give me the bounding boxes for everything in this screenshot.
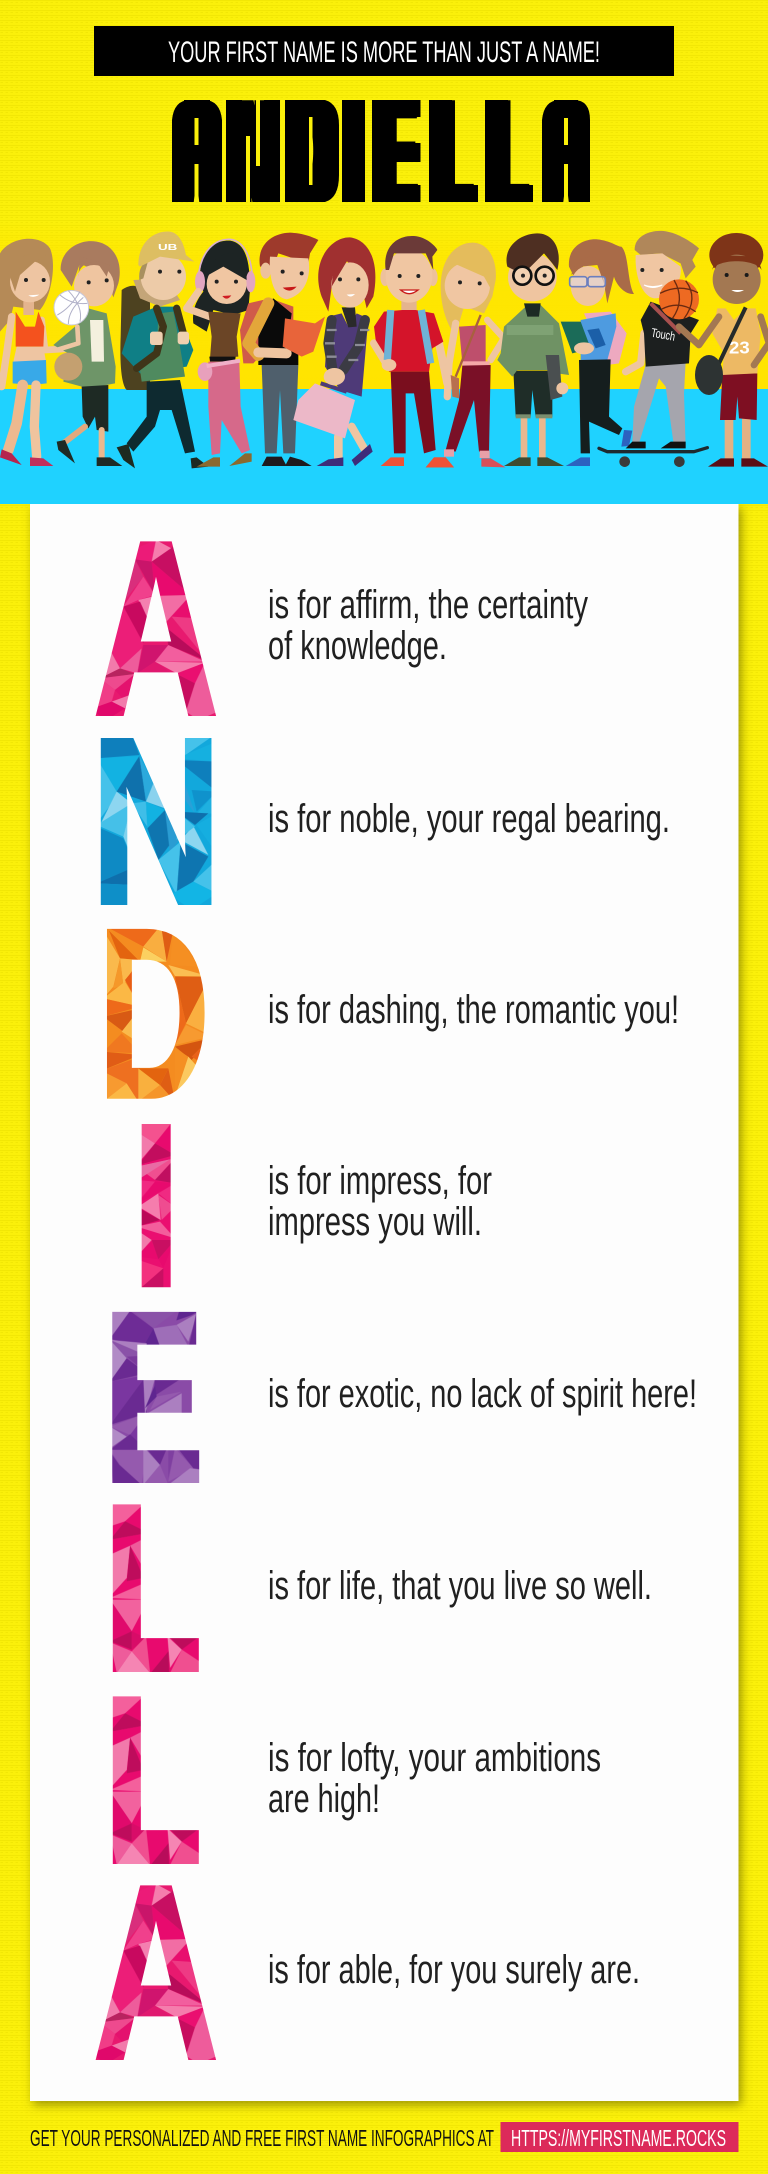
person: skateboarder with basketball: Touch — [650, 326, 676, 344]
person: blonde girl — [426, 243, 506, 467]
text: A line — [268, 583, 588, 668]
letter I: I — [128, 1073, 184, 1338]
letter N: N — [90, 688, 222, 953]
text: second L line: are high! — [268, 1777, 380, 1821]
person: ponytail girl with tablet — [561, 239, 634, 466]
person: curly haired boy with satchel: 23 — [729, 337, 750, 357]
text: I line: is for impress, for — [268, 1159, 492, 1203]
person: boy in red t-shirt — [374, 236, 454, 467]
letter E: E — [104, 1263, 203, 1532]
top banner — [94, 26, 674, 76]
person: boy with book — [240, 233, 325, 466]
text: A line: of knowledge. — [268, 624, 447, 668]
text: second L line: is for lofty, your ambitions — [268, 1736, 601, 1780]
person: girl with long hair — [0, 239, 75, 466]
text: I line — [268, 1159, 492, 1244]
person: boy with glasses and laptop — [497, 233, 569, 466]
illustration: group of twelve students, right half — [374, 231, 768, 467]
text: A line: is for affirm, the certainty — [268, 583, 588, 627]
letter L: L — [105, 1650, 201, 1909]
person: red haired girl with pink bag — [293, 237, 375, 466]
illustration: group of twelve students, left half — [0, 231, 375, 468]
person: skateboarder with basketball — [599, 231, 707, 467]
blue floor band — [0, 389, 768, 504]
letter A: A — [93, 1834, 219, 2111]
person: hiker with cap and backpack — [117, 231, 208, 468]
text: I line: impress you will. — [268, 1200, 482, 1244]
letter A: A — [93, 490, 219, 767]
letter D: D — [98, 879, 210, 1148]
panel: white acrostic card — [30, 504, 738, 2101]
person: hiker with cap and backpack: UB — [158, 242, 177, 252]
person: girl with headphones — [187, 239, 255, 467]
person: curly haired boy with satchel — [679, 233, 768, 467]
text: second L line — [268, 1736, 601, 1821]
title: name: ANDIELLA — [178, 72, 584, 233]
person: girl with volleyball — [53, 241, 122, 466]
letter L: L — [105, 1458, 201, 1717]
icon: basketball — [659, 279, 699, 319]
